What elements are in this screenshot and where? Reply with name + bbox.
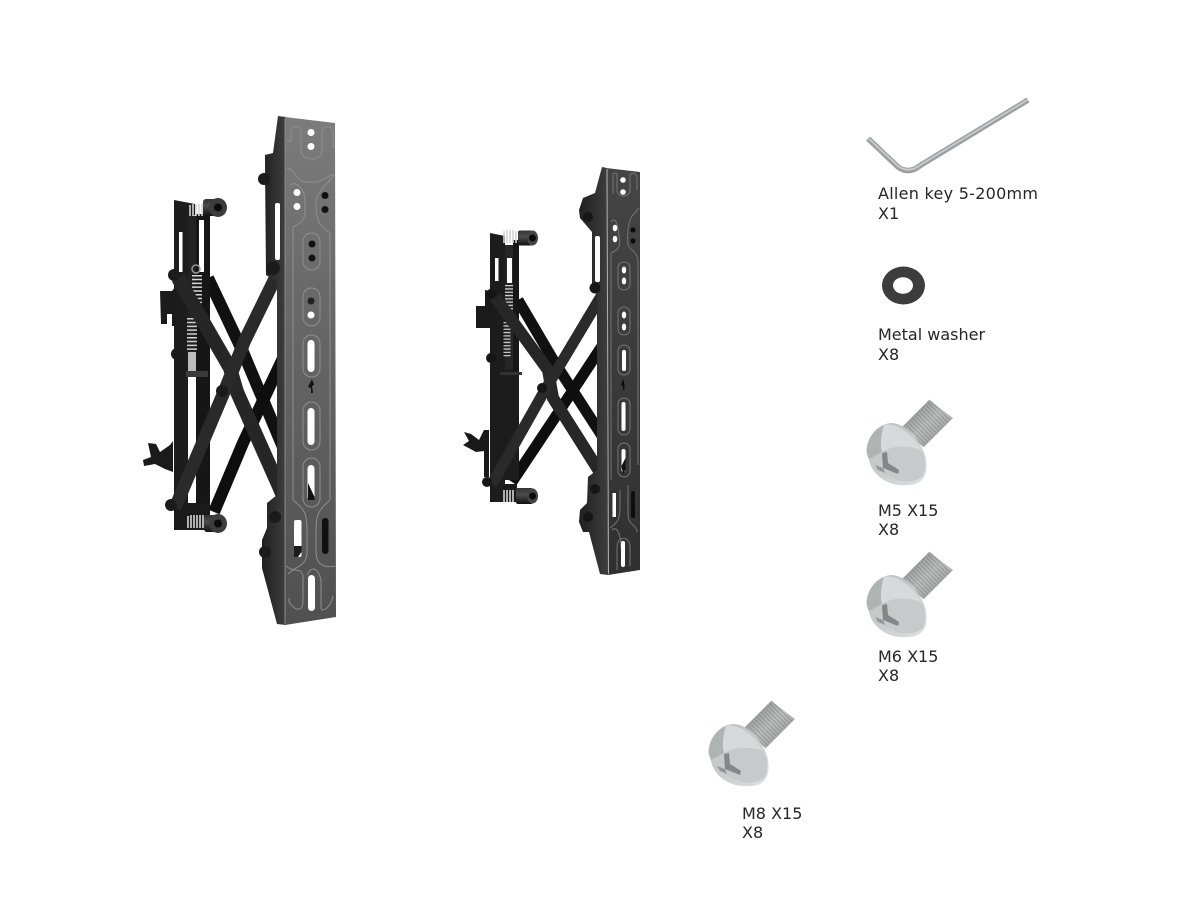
label: allen key: Allen key 5-200mm (878, 184, 1038, 203)
hook tab (160, 285, 177, 326)
label: allen key: X1 (878, 204, 899, 223)
scissor arm upper-left to lower-right (495, 297, 606, 482)
label: M8 screw: M8 X15 (742, 804, 802, 823)
small mounting bracket (463, 167, 640, 575)
locking lever (143, 441, 173, 472)
scissor arm upper-left to lower-right (178, 278, 285, 500)
flange and arm bolts (165, 173, 281, 558)
upper knob and spring (504, 230, 538, 246)
front plate (285, 117, 336, 625)
label: M6 screw: X8 (878, 666, 899, 685)
label: M8 screw: X8 (742, 823, 763, 842)
rear scissor arms (208, 278, 285, 512)
scissor arm lower-left to upper-right (492, 288, 606, 484)
large mounting bracket (143, 116, 336, 625)
icon: M5 screw (867, 400, 953, 485)
lower knob and spring (188, 514, 227, 533)
rear scissor arms (512, 300, 606, 482)
locking lever and post (463, 430, 489, 477)
plate slots and holes (294, 129, 328, 611)
left carriage rails (174, 200, 210, 530)
hook tab (476, 290, 495, 332)
plate slots and holes (612, 177, 636, 567)
side flange (262, 116, 286, 625)
lower knob and spring (504, 488, 538, 504)
label: metal washer: X8 (878, 345, 899, 364)
icon: allen key (868, 100, 1028, 171)
flange and arm bolts (482, 212, 600, 522)
scissor arm lower-left to upper-right (175, 258, 285, 508)
front plate (606, 168, 640, 575)
left carriage rails (490, 233, 522, 502)
embossed outlines (286, 127, 335, 610)
label: M6 screw: M6 X15 (878, 647, 938, 666)
label: M5 screw: M5 X15 (878, 501, 938, 520)
vertical springs (192, 265, 200, 352)
vertical springs (507, 285, 509, 357)
upper knob and spring (190, 198, 227, 217)
label: metal washer: Metal washer (878, 325, 985, 344)
icon: M8 screw (709, 701, 795, 786)
label: M5 screw: X8 (878, 520, 899, 539)
icon: M6 screw (867, 552, 953, 637)
embossed outlines (610, 173, 639, 570)
icon: metal washer (882, 266, 925, 304)
side flange (579, 167, 608, 575)
